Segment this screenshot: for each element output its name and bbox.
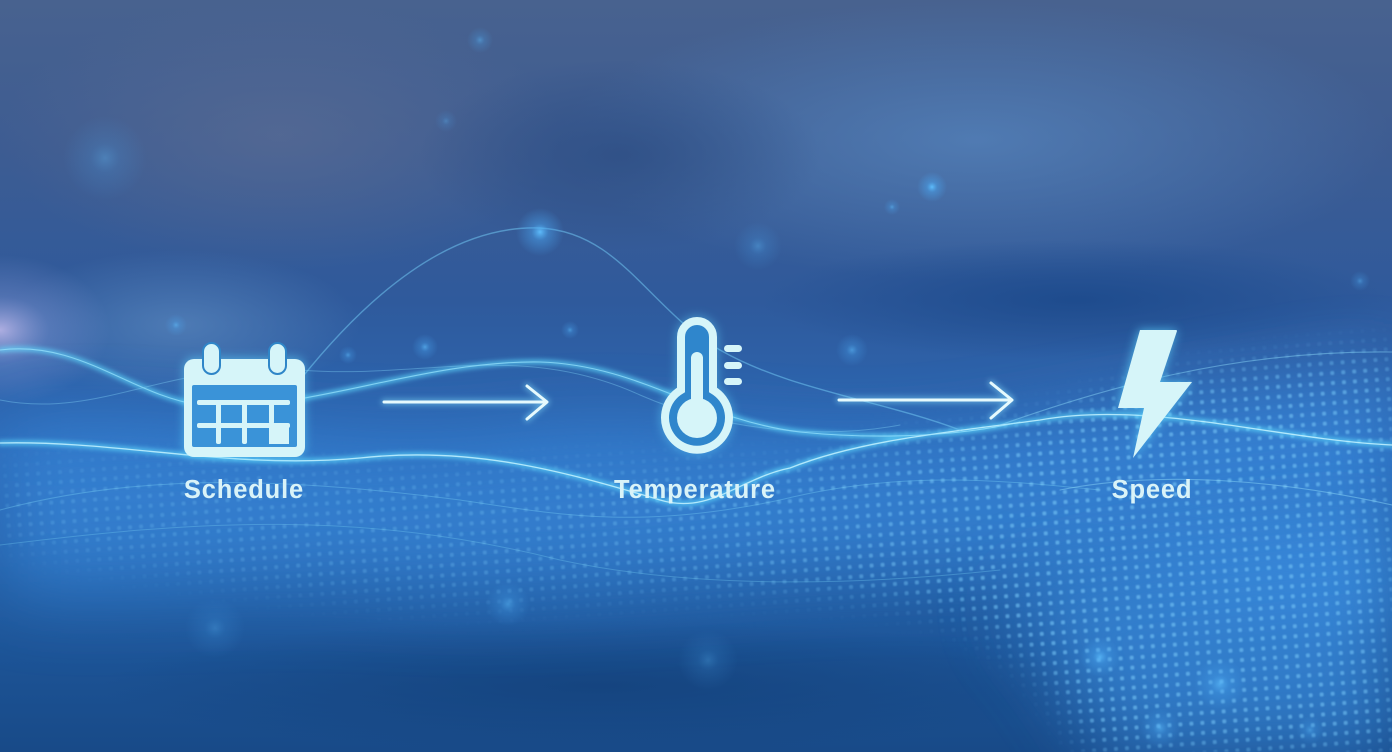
dotted mesh wave <box>5 339 1392 752</box>
label: Temperature: Temperature <box>614 476 776 504</box>
icon: calendar <box>184 343 305 457</box>
arrow: schedule to temperature <box>384 386 547 419</box>
icon: lightning bolt <box>1118 330 1192 458</box>
label: Schedule: Schedule <box>184 476 304 504</box>
arrow: temperature to speed <box>839 383 1012 418</box>
flowing light lines <box>0 228 1392 582</box>
icon: thermometer <box>665 321 742 450</box>
label: Speed: Speed <box>1112 476 1192 504</box>
